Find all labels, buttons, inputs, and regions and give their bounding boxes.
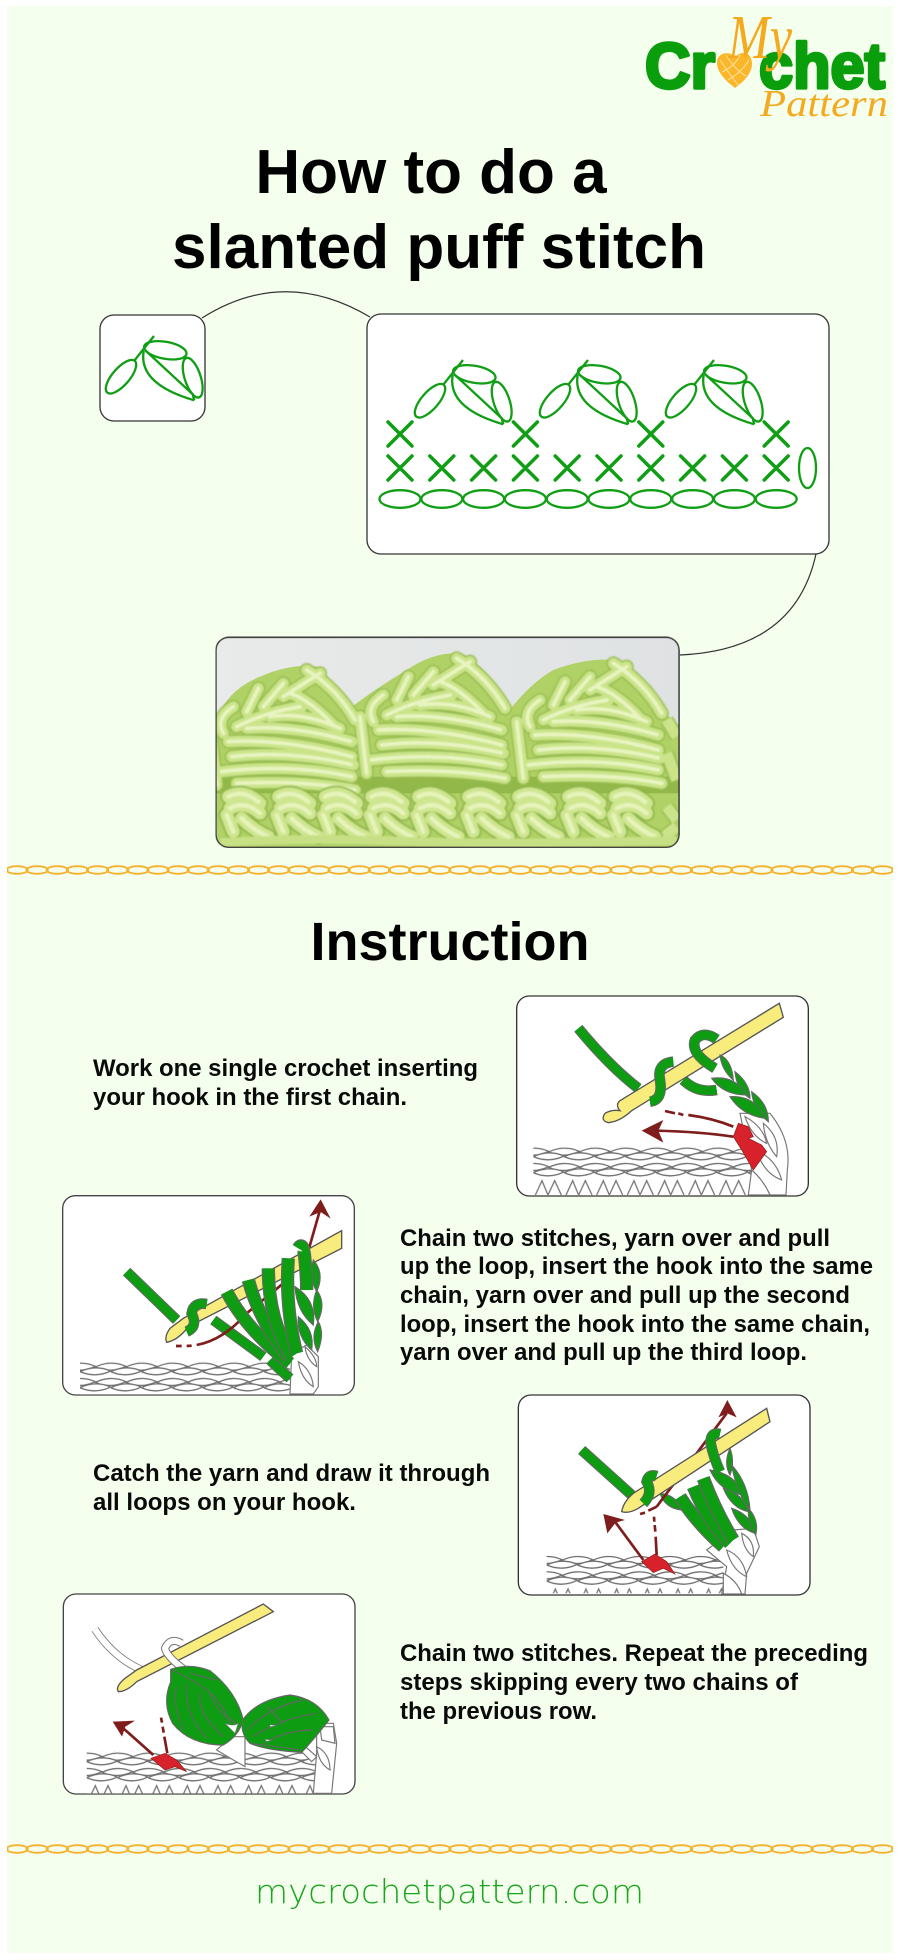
divider: yarn chain bottom xyxy=(7,1843,893,1855)
red stitch xyxy=(151,1753,187,1772)
title line 2: slanted puff stitch xyxy=(172,213,706,282)
footer url: mycrochetpattern.com xyxy=(255,1872,644,1911)
first puff xyxy=(167,1666,243,1745)
text: step 4: steps skipping every two chains of xyxy=(400,1669,799,1696)
text: step 2: chain, yarn over and pull up the second xyxy=(400,1282,850,1309)
title line 1: How to do a xyxy=(255,138,607,207)
puff stitch symbol xyxy=(101,336,207,400)
arrow left xyxy=(642,1120,733,1143)
arrow left xyxy=(603,1514,643,1560)
side chain xyxy=(290,1345,318,1394)
puff loops xyxy=(660,1478,733,1547)
side chain xyxy=(707,1528,759,1594)
dashed guide xyxy=(161,1718,167,1753)
chain leaves xyxy=(712,1055,768,1122)
panel: step 3 illustration xyxy=(518,1395,810,1595)
logo word: Crochet: Cr xyxy=(645,30,715,102)
red curve xyxy=(176,1283,283,1346)
stitch post xyxy=(217,1737,245,1767)
right side chain leaves xyxy=(295,1260,322,1352)
foundation chain xyxy=(380,490,797,508)
connector: chart to photo xyxy=(680,554,816,655)
arrow path dashed xyxy=(665,1111,733,1127)
text: step 2: up the loop, insert the hook into the same xyxy=(400,1253,873,1280)
text: step 3: all loops on your hook. xyxy=(93,1489,356,1516)
side chain xyxy=(740,1113,788,1195)
stitch row xyxy=(547,1555,723,1593)
arrow left xyxy=(113,1721,153,1755)
text: step 1: your hook in the first chain. xyxy=(93,1084,407,1111)
logo word: My: My xyxy=(727,4,792,72)
stitch row xyxy=(533,1147,753,1195)
text: step 1 xyxy=(93,1055,478,1111)
text: step 4: the previous row. xyxy=(400,1698,597,1725)
logo heart yarn ball xyxy=(717,53,752,88)
yarn wrap xyxy=(187,1304,207,1332)
red stitch xyxy=(642,1554,675,1574)
logo: My Crochet Pattern xyxy=(645,4,888,125)
yarn tail xyxy=(582,1450,632,1495)
yarn wraps xyxy=(643,1434,720,1503)
arrow up xyxy=(307,1199,331,1257)
red stitch xyxy=(733,1123,767,1170)
logo word: Crochet: chet xyxy=(759,30,885,102)
panel: step 4 illustration xyxy=(63,1594,355,1794)
panel: step 1 illustration xyxy=(517,996,808,1196)
crochet hook xyxy=(622,1408,770,1512)
text: step 3: Catch the yarn and draw it through xyxy=(93,1460,490,1487)
title xyxy=(172,138,706,282)
stitch row xyxy=(87,1752,327,1793)
upper loop xyxy=(694,1035,717,1068)
puff symbols row xyxy=(410,360,767,424)
side chain leaves xyxy=(710,1448,757,1535)
text: step 2: yarn over and pull up the third loop. xyxy=(400,1339,807,1366)
panel: single puff symbol xyxy=(100,315,207,421)
crochet hook xyxy=(117,1604,273,1692)
dashed guide xyxy=(640,1507,657,1555)
yarn tail xyxy=(578,1028,638,1088)
single crochet second row xyxy=(388,456,788,480)
divider: yarn chain top xyxy=(7,864,893,876)
text: step 2: Chain two stitches, yarn over and pull xyxy=(400,1225,830,1252)
pulled-up loops xyxy=(227,1246,307,1378)
heading: Instruction: Instruction xyxy=(310,912,590,972)
stitch row xyxy=(80,1362,290,1394)
text: step 2 xyxy=(400,1225,873,1366)
side chain xyxy=(300,1723,337,1793)
crochet hook xyxy=(166,1231,342,1342)
panel: stitch chart xyxy=(367,314,829,554)
second puff xyxy=(242,1695,329,1752)
text: step 2: loop, insert the hook into the same chain, xyxy=(400,1311,870,1338)
text: step 1: Work one single crochet inserting xyxy=(93,1055,478,1082)
text: step 4 xyxy=(400,1640,868,1725)
yarn tail xyxy=(127,1272,263,1357)
panel: step 2 illustration xyxy=(63,1196,354,1395)
lower loop xyxy=(683,1080,717,1091)
connector: small symbol to chart xyxy=(202,292,370,318)
text: step 3 xyxy=(93,1460,490,1516)
turning chain xyxy=(799,448,816,488)
white loop xyxy=(165,1641,185,1670)
single crochet top row xyxy=(388,422,788,446)
logo word: Pattern: Pattern xyxy=(759,83,888,125)
crochet hook xyxy=(603,1003,783,1123)
arrow up through hook xyxy=(657,1400,737,1507)
white yarn tail xyxy=(95,1629,142,1670)
photo: crocheted slanted puff edging xyxy=(210,637,679,847)
text: step 4: Chain two stitches. Repeat the preceding xyxy=(400,1640,868,1667)
yarn wrap xyxy=(650,1062,673,1102)
